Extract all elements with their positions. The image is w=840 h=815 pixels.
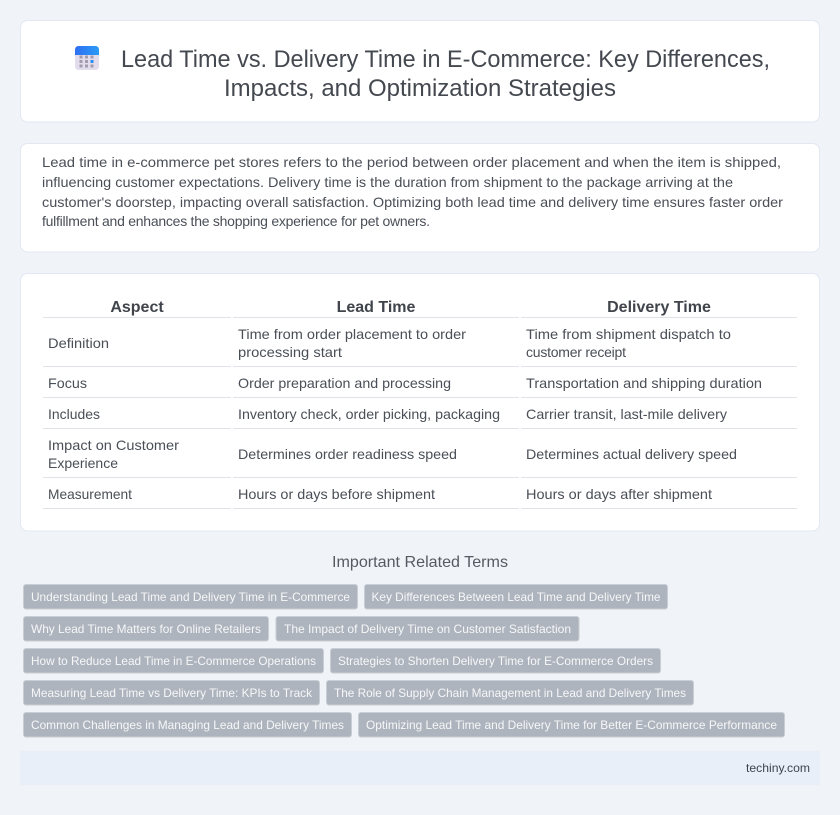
title: Impacts, and Optimization Strategies: [224, 75, 616, 102]
panel: header: [20, 20, 820, 122]
tag: [364, 584, 668, 609]
tag: The Impact of Delivery Time on Customer Satisfaction: [284, 622, 571, 636]
table row: focus: Transportation and shipping duration: [526, 375, 762, 391]
table row: measurement: Hours or days before shipment: [238, 486, 435, 502]
tag: Strategies to Shorten Delivery Time for E-Commerce Orders: [338, 654, 653, 668]
tag: Measuring Lead Time vs Delivery Time: KPIs to Track: [31, 686, 313, 700]
panel: comparison table: [20, 274, 820, 531]
icon: calendar: [75, 46, 99, 70]
table header: Lead Time: [337, 299, 416, 316]
table row: includes: [43, 406, 797, 429]
tag: [330, 648, 660, 673]
table row: focus: Order preparation and processing: [238, 375, 451, 391]
table row: focus: Focus: [48, 375, 87, 391]
table row: includes: Inventory check, order picking, packaging: [238, 406, 500, 422]
heading: important related terms: Important Related Terms: [332, 554, 508, 571]
tag: [24, 648, 324, 673]
table row: measurement: [43, 486, 797, 509]
text block: introduction: influencing customer expectations. Delivery time is the duration from shipment to the package arriving at the: [42, 174, 733, 190]
footer: techiny.com: [746, 761, 810, 775]
tag: [24, 616, 268, 641]
tag: [24, 680, 320, 705]
table row: definition: processing start: [238, 344, 342, 360]
tag: Optimizing Lead Time and Delivery Time for Better E-Commerce Performance: [366, 718, 777, 732]
tag: [326, 680, 694, 705]
panel: introduction: [20, 144, 820, 252]
tag: Understanding Lead Time and Delivery Time in E-Commerce: [31, 590, 350, 604]
table row: includes: Carrier transit, last-mile delivery: [526, 406, 727, 422]
title: Lead Time vs. Delivery Time in E-Commerce: Key Differences,: [121, 46, 770, 73]
related term tags: [24, 584, 784, 737]
table row: includes: Includes: [48, 406, 100, 422]
table row: definition: Time from order placement to order: [238, 326, 466, 342]
table row: focus: [43, 375, 797, 398]
title: [121, 46, 770, 102]
tag: How to Reduce Lead Time in E-Commerce Operations: [31, 654, 316, 668]
table row: definition: Time from shipment dispatch to: [526, 326, 731, 342]
text block: introduction: Lead time in e-commerce pet stores refers to the period between order placement and when the item is shipped,: [42, 154, 781, 170]
tag: [358, 712, 784, 737]
table row: impact on customer experience: Determines order readiness speed: [238, 446, 457, 462]
table header: Delivery Time: [607, 299, 711, 316]
table row: measurement: Measurement: [48, 486, 132, 502]
table row: impact on customer experience: [43, 437, 797, 478]
table row: definition: [43, 326, 797, 367]
table header: [43, 299, 797, 318]
text block: introduction: [42, 154, 783, 229]
table row: measurement: Hours or days after shipment: [526, 486, 712, 502]
tag: Why Lead Time Matters for Online Retailers: [31, 622, 261, 636]
table row: impact on customer experience: Determines actual delivery speed: [526, 446, 737, 462]
table row: definition: customer receipt: [526, 344, 626, 360]
table row: impact on customer experience: Impact on Customer: [48, 437, 179, 453]
table header: Aspect: [110, 299, 164, 316]
text block: introduction: fulfillment and enhances the shopping experience for pet owners.: [42, 213, 430, 229]
tag: [24, 584, 358, 609]
tag: [24, 712, 352, 737]
table row: impact on customer experience: Experience: [48, 455, 118, 471]
tag: [276, 616, 579, 641]
tag: The Role of Supply Chain Management in Lead and Delivery Times: [334, 686, 686, 700]
text block: introduction: customer's doorstep, impacting overall satisfaction. Optimizing both lead time and delivery time ensures faster order: [42, 194, 783, 210]
tag: Common Challenges in Managing Lead and Delivery Times: [31, 718, 344, 732]
table row: definition: Definition: [48, 335, 109, 351]
footer: [20, 751, 820, 785]
tag: Key Differences Between Lead Time and Delivery Time: [372, 590, 661, 604]
